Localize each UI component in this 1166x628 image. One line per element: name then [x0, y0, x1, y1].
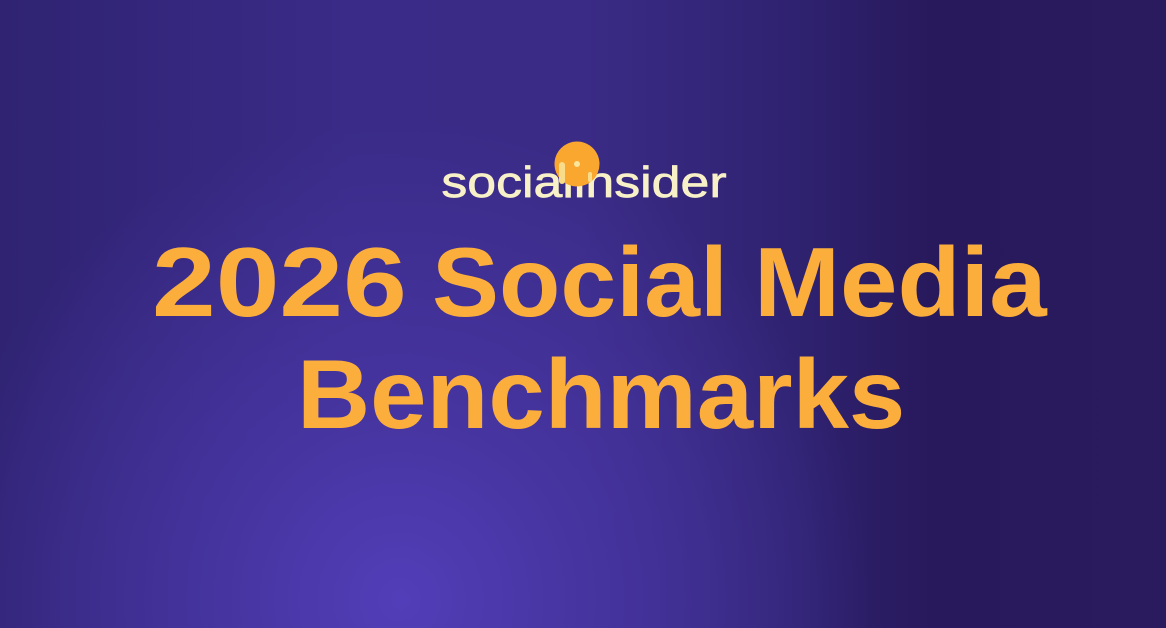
title line 1 — [152, 227, 1048, 337]
title line 1: Social — [432, 227, 728, 337]
logo icon: orange circle — [554, 142, 600, 186]
logo: socialinsider — [441, 142, 727, 207]
title line 1: Media — [754, 227, 1047, 337]
title line 1: 2026 — [152, 227, 407, 337]
title line 2: Benchmarks — [297, 339, 905, 449]
logo wordmark: socialinsider — [441, 158, 727, 207]
